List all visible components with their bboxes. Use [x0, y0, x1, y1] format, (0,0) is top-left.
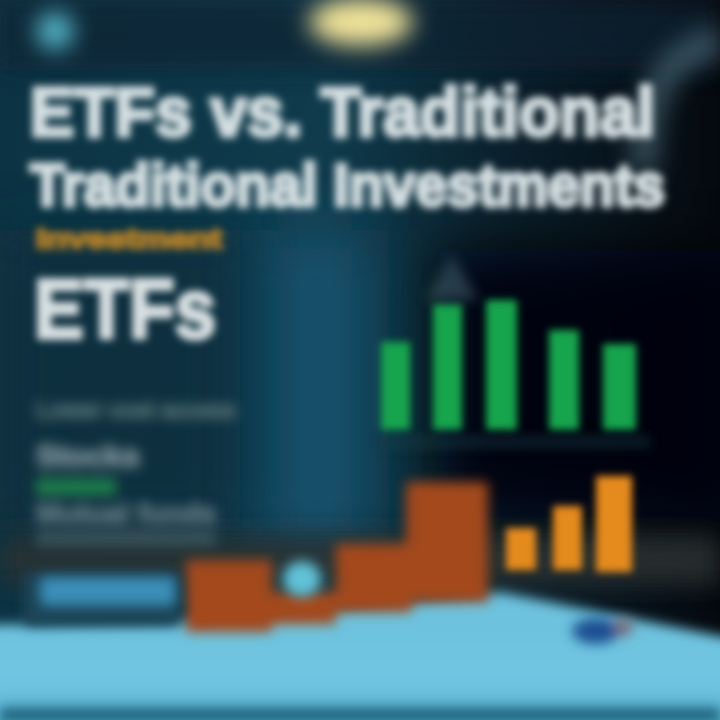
text block: left description: Lower cost access — [36, 397, 236, 424]
text block: left description: Mutual funds — [36, 498, 216, 528]
subheading: orange label: Investment — [36, 223, 222, 254]
decoration: curved pipe, upper right — [645, 40, 720, 170]
icon: ceiling lamp glow — [309, 0, 413, 46]
decoration: grey peak above bars — [425, 255, 478, 300]
title: ETFs vs. Traditional — [30, 73, 655, 151]
bar chart: orange bars — [506, 476, 632, 572]
icon: small object on desk — [572, 618, 633, 644]
bar chart: green bars — [381, 300, 636, 430]
icon: glowing round light, upper left — [37, 13, 73, 49]
chart baseline glow — [380, 438, 650, 446]
title: Traditional Investments — [30, 152, 665, 219]
desk surface — [0, 592, 720, 720]
text block: left description — [36, 397, 236, 546]
heading: ETFs: ETFs — [34, 262, 216, 356]
bar chart: brown blocks — [186, 482, 488, 632]
title — [30, 73, 665, 219]
icon: tablet on desk — [24, 572, 180, 626]
text block: left description: Stocks — [36, 440, 140, 473]
icon: blue disc on brown blocks — [283, 561, 321, 597]
